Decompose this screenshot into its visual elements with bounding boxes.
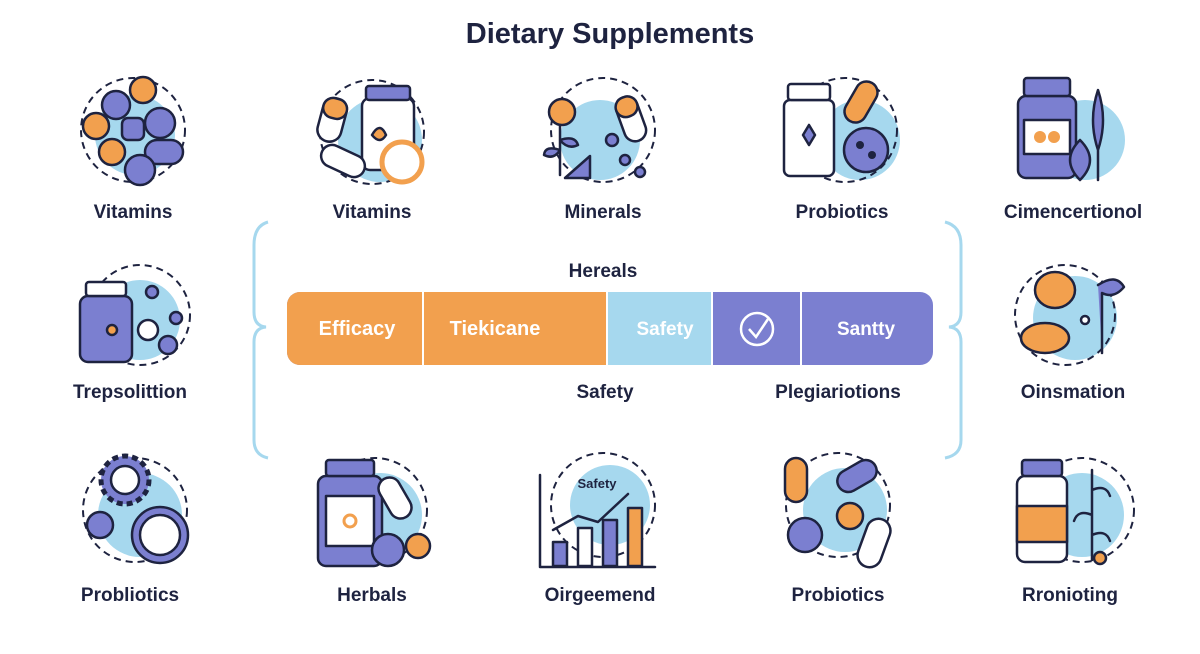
label: Plegiariotions: Plegiariotions: [775, 382, 901, 403]
bracket: right: [945, 222, 961, 458]
bar: comparison segments: Santty: [837, 319, 895, 340]
bar: comparison segments: Safety: [636, 319, 694, 340]
bar: comparison segments: Efficacy: [319, 318, 396, 340]
icon: gear probiotics: [83, 456, 188, 563]
title: Dietary Supplements: [466, 18, 754, 50]
label: Minerals: Minerals: [564, 202, 642, 223]
bracket: left: [254, 222, 268, 458]
label: Herbals: Herbals: [337, 585, 407, 606]
label: Vitamins 2: Vitamins: [333, 202, 411, 223]
icon: vitamin jar and capsules: [315, 80, 424, 184]
icon: vitamins pills cluster: [81, 77, 185, 185]
label: Probliotics: Probliotics: [81, 585, 179, 606]
icon: probiotics bottle: [784, 77, 900, 182]
label: Safety: Safety: [576, 382, 634, 403]
icon: microbes: [1015, 265, 1124, 365]
icon: minerals: [544, 78, 655, 182]
label: Oirgeemend: Oirgeemend: [545, 585, 655, 606]
icon: bar chart safety: [540, 453, 655, 567]
label: Oinsmation: Oinsmation: [1021, 382, 1125, 403]
icon: herbal jar: [1018, 78, 1125, 180]
label: Probiotics: Probiotics: [796, 202, 888, 223]
label: Probiotics 2: Probiotics: [792, 585, 884, 606]
icon: herbal jar with sun: [318, 458, 430, 566]
icon: bar chart safety: Safety: [577, 476, 617, 491]
bar: comparison segments: [287, 292, 933, 365]
label: Cimencertionol: Cimencertionol: [1004, 202, 1142, 223]
label: Hereals: Hereals: [569, 261, 637, 282]
label: Trepsolittion: Trepsolittion: [73, 382, 187, 403]
icon: probiotics microbes: [785, 453, 894, 571]
label: Vitamins: Vitamins: [94, 202, 172, 223]
bar: comparison segments: Tiekicane: [450, 318, 540, 340]
icon: bottle with plant: [1017, 458, 1134, 564]
icon: jar with bubbles: [80, 265, 190, 365]
label: Rronioting: Rronioting: [1022, 585, 1118, 606]
